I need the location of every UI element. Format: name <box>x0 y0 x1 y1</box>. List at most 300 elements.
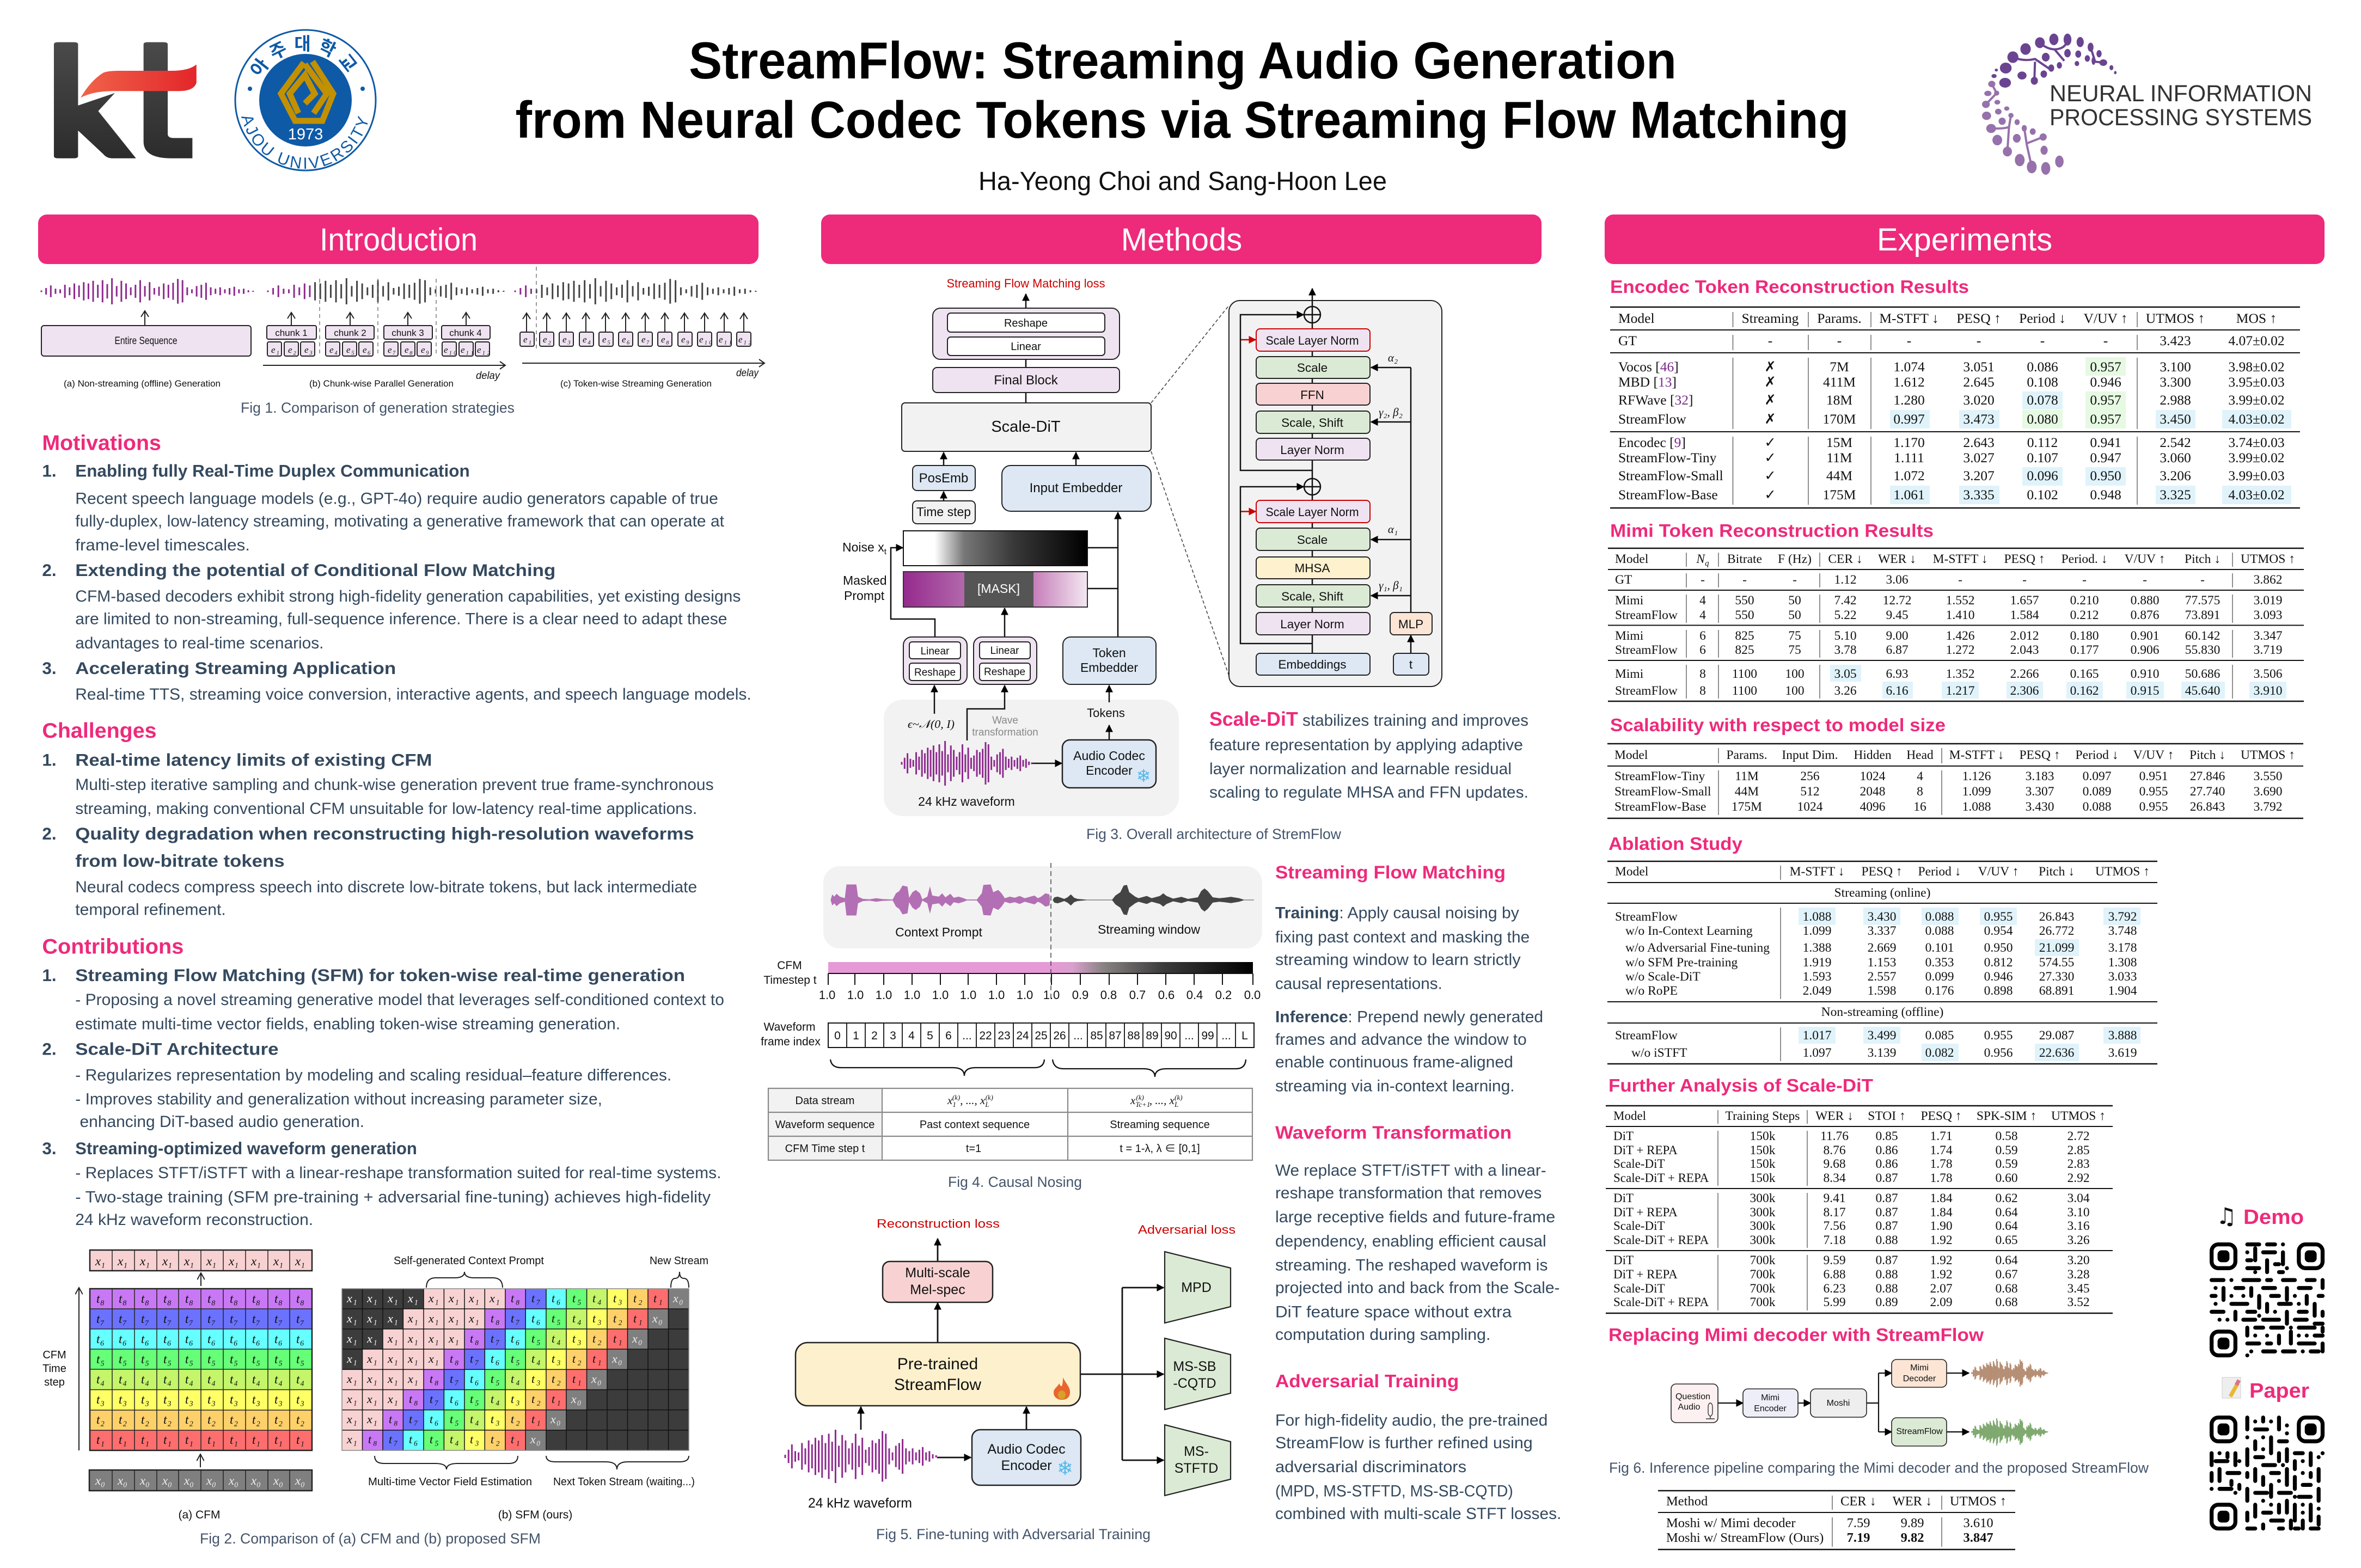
table: Ablation Study: 22.636 <box>2039 1046 2075 1060</box>
table: Further Analysis: 0.64 <box>1995 1253 2018 1267</box>
table: Mimi results: 3.05 <box>1834 667 1857 681</box>
table: Ablation Study: 574.55 <box>2039 955 2074 970</box>
table: Scalability: Period ↓ <box>2076 748 2118 762</box>
table: Encodec results: 2.645 <box>1963 374 1995 390</box>
figure 6: inference pipeline <box>1671 1359 2048 1446</box>
table: Mimi results: 1.584 <box>2010 608 2039 622</box>
table: Moshi comparison: CER ↓ <box>1840 1494 1876 1509</box>
table: Mimi results: 6 <box>1699 629 1706 643</box>
table: Further Analysis: Scale-DiT <box>1613 1219 1665 1233</box>
text block: Methods explanations: We replace STFT/iSTFT with a linear- <box>1275 1161 1546 1179</box>
table: Encodec results: 4.03±0.02 <box>2228 487 2285 503</box>
figure 4: causal noising: 0.9 <box>1072 988 1088 1002</box>
table: Ablation Study: 27.330 <box>2039 970 2074 984</box>
chart: SFM grid: x₁x₁x₁x₁x₁x₁x₁x₁x₁x₁ <box>346 1291 418 1365</box>
table: Further Analysis: 1.84 <box>1930 1191 1953 1205</box>
table: Mimi results: 5.10 <box>1834 629 1857 643</box>
table: Scalability: 512 <box>1800 785 1820 799</box>
table: Scalability: 0.951 <box>2139 769 2168 783</box>
table: Further Analysis: 0.68 <box>1995 1282 2018 1296</box>
table: data stream: t=1 <box>966 1143 981 1155</box>
table: Encodec results: ✗ <box>1764 374 1776 390</box>
diagram: main pipeline <box>842 277 1229 808</box>
panel: Scale-DiT block detail: γ₂, β₂ <box>1379 406 1403 419</box>
table: Further Analysis: 0.86 <box>1875 1157 1898 1171</box>
text block: Methods explanations: frames and advance the window to <box>1275 1031 1527 1049</box>
table: Further Analysis: Training Steps <box>1726 1109 1800 1123</box>
table: Moshi comparison: Moshi w/ StreamFlow (Ours) <box>1666 1530 1824 1545</box>
table: Further Analysis: 0.88 <box>1875 1282 1898 1296</box>
table: Encodec results: 0.102 <box>2027 487 2058 503</box>
panel header: Methods <box>821 215 1542 264</box>
figure 4: causal noising: 1.0 <box>960 988 976 1002</box>
table: Encodec results: MOS ↑ <box>2236 310 2277 326</box>
table: Further Analysis: 9.41 <box>1823 1191 1846 1205</box>
table: Scalability: 2048 <box>1860 785 1885 799</box>
table: Ablation Study: 0.353 <box>1925 955 1954 970</box>
table: Encodec results: 3.027 <box>1963 450 1995 465</box>
table: Mimi results: 0.915 <box>2131 684 2159 698</box>
figure 2: CFM and SFM grids: (b) SFM (ours) <box>498 1509 572 1521</box>
table: data stream: , ..., x <box>960 1094 986 1107</box>
table: Mimi results: 77.575 <box>2185 593 2220 608</box>
diagram: main pipeline: Streaming Flow Matching loss <box>946 277 1105 290</box>
table: Mimi results: M-STFT ↓ <box>1933 552 1987 566</box>
table: Ablation Study: 0.946 <box>1984 970 2013 984</box>
heading: Replacing Mimi decoder: Replacing Mimi decoder with StreamFlow <box>1608 1325 1984 1345</box>
text block: Methods explanations: Streaming Flow Matching <box>1275 862 1506 883</box>
table: Scalability: 3.307 <box>2026 785 2054 799</box>
table: Mimi results: 3.506 <box>2254 667 2283 681</box>
figure 1: generation strategies: chunk 4 <box>449 328 482 338</box>
table: Scalability: StreamFlow-Small <box>1614 785 1711 799</box>
table: Scalability: 0.089 <box>2083 785 2111 799</box>
table: Ablation Study: 3.748 <box>2108 924 2137 938</box>
table: Further Analysis: DiT + REPA <box>1613 1205 1678 1219</box>
chart: SFM grid <box>341 1256 708 1487</box>
figure 5: adversarial fine-tuning: -CQTD <box>1173 1376 1216 1391</box>
text block: Introduction column: 1. <box>42 750 57 770</box>
table: Mimi results: 825 <box>1735 629 1754 643</box>
table: Encodec results: RFWave [32] <box>1618 392 1693 408</box>
table: data stream <box>768 1088 1252 1160</box>
table: Encodec results: 1.111 <box>1894 450 1924 465</box>
table: Encodec results: 3.423 <box>2160 333 2191 348</box>
table: Mimi results: 1100 <box>1732 667 1757 681</box>
table: Ablation Study: 0.955 <box>1984 910 2013 924</box>
table: Encodec results: 3.060 <box>2160 450 2191 465</box>
chart: SFM grid: x₀x₀x₀x₀x₀x₀x₀x₀ <box>530 1291 683 1446</box>
table: Further Analysis: 0.89 <box>1875 1295 1898 1309</box>
table: Further Analysis: 1.78 <box>1930 1171 1953 1185</box>
text block: Methods explanations: Training: Apply causal noising by <box>1275 904 1519 922</box>
table: data stream: 1 <box>952 1100 956 1108</box>
text block: Introduction column: frame-level timescales. <box>75 536 250 554</box>
table: Mimi results: Period. ↓ <box>2062 552 2107 566</box>
table: Mimi results: GT <box>1615 573 1632 587</box>
text block: Methods explanations <box>1275 862 1561 1523</box>
table: Encodec results: ✗ <box>1764 392 1776 408</box>
table: Encodec results: ✓ <box>1764 434 1776 450</box>
text block: Methods explanations: causal representations. <box>1275 975 1442 993</box>
table: Ablation Study: w/o In-Context Learning <box>1625 924 1753 938</box>
figure 4: causal noising: Context Prompt <box>895 925 982 939</box>
table: Mimi results: 0.906 <box>2131 643 2160 657</box>
table: Encodec results: 0.080 <box>2027 411 2058 427</box>
table: Moshi comparison: 9.82 <box>1901 1530 1924 1545</box>
table: Ablation Study: 1.904 <box>2108 984 2137 998</box>
figure 4: causal noising: 0.2 <box>1215 988 1232 1002</box>
table: Mimi results: 4 <box>1699 608 1706 622</box>
figure 3: overall architecture <box>842 277 1442 816</box>
table: Scalability: 1.099 <box>1962 785 1991 799</box>
table: Mimi results: 50.686 <box>2185 667 2221 681</box>
table: Encodec results: 18M <box>1826 392 1852 408</box>
table: data stream: Waveform sequence <box>775 1119 874 1131</box>
diagram: main pipeline: Token <box>1092 646 1126 660</box>
figure 6: inference pipeline: Encoder <box>1754 1404 1787 1413</box>
table: Ablation Study: 3.619 <box>2108 1046 2137 1060</box>
table: Further Analysis: 0.87 <box>1875 1191 1898 1205</box>
table: Ablation Study: 3.430 <box>1868 910 1896 924</box>
table: data stream: Past context sequence <box>920 1119 1030 1131</box>
table: data stream: L <box>984 1100 989 1108</box>
link: Paper: Paper <box>2249 1380 2309 1402</box>
table: Further Analysis: 700k <box>1750 1253 1776 1267</box>
table: Scalability: 11M <box>1735 769 1759 783</box>
table: Ablation Study: 0.176 <box>1925 984 1954 998</box>
table: Mimi results: 50 <box>1788 608 1801 622</box>
figure 4: causal noising: 1.0 <box>847 988 864 1002</box>
table: Encodec results: 7M <box>1830 359 1849 375</box>
table: Encodec results: 3.99±0.02 <box>2228 392 2285 408</box>
text block: Methods explanations: computation during sampling. <box>1275 1326 1490 1344</box>
table: Ablation Study: w/o RoPE <box>1625 984 1678 998</box>
figure 4: causal noising: Timestep t <box>763 974 817 987</box>
figure 5: adversarial fine-tuning: STFTD <box>1175 1461 1218 1476</box>
table: Mimi results: 1.272 <box>1946 643 1974 657</box>
table: Scalability: 3.792 <box>2254 800 2282 814</box>
text block: Methods explanations: DiT feature space without extra <box>1275 1303 1512 1321</box>
panel header: Introduction <box>38 215 759 264</box>
heading: Scalability: Scalability with respect to model size <box>1610 715 1946 735</box>
figure 5: adversarial fine-tuning: Multi-scale <box>905 1265 970 1281</box>
table: Ablation Study: 0.956 <box>1984 1046 2013 1060</box>
chart: SFM grid: x₁x₁x₁x₁t₈t₇t₆t₅t₄t₃t₂t₁ <box>407 1312 643 1325</box>
table: Encodec results: Encodec [9] <box>1618 434 1686 450</box>
table: Encodec results: 0.107 <box>2027 450 2058 465</box>
table: Further Analysis: 1.92 <box>1930 1233 1953 1247</box>
table: Further Analysis: 1.71 <box>1930 1129 1953 1143</box>
text block: Introduction column: Motivations <box>42 432 161 455</box>
table: Mimi results: Pitch ↓ <box>2185 552 2221 566</box>
table: Ablation Study: Streaming (online) <box>1834 886 1930 900</box>
table: Encodec results: V/UV ↑ <box>2083 310 2128 326</box>
figure 4: causal noising: 6 <box>945 1030 952 1042</box>
table: Scalability: 44M <box>1735 785 1759 799</box>
figure 4: causal noising: 1.0 <box>932 988 949 1002</box>
table: Mimi results: 6.87 <box>1886 643 1909 657</box>
table: Ablation Study: 1.088 <box>1803 910 1831 924</box>
text block: Methods explanations: (MPD, MS-STFTD, MS-SB-CQTD) <box>1275 1482 1513 1500</box>
table: Ablation Study: 3.888 <box>2108 1028 2137 1043</box>
table: Mimi results: 550 <box>1735 593 1754 608</box>
table: Mimi results: 1.657 <box>2010 593 2039 608</box>
table: Further Analysis: 0.65 <box>1995 1233 2018 1247</box>
link: Demo <box>2216 1203 2304 1229</box>
diagram: main pipeline: Reshape <box>1004 317 1048 329</box>
figure 4: causal noising: 85 <box>1090 1030 1103 1042</box>
text block: Introduction column: Real-time latency limits of existing CFM <box>75 750 432 770</box>
text block: Scale-DiT description: feature representation by applying adaptive <box>1209 736 1523 754</box>
table: Encodec results: 11M <box>1826 450 1852 465</box>
panel: Scale-DiT block detail: Layer Norm <box>1280 617 1344 631</box>
table: Mimi results: 3.719 <box>2254 643 2282 657</box>
table: Further Analysis: 11.76 <box>1820 1129 1849 1143</box>
table: Mimi results: Mimi <box>1615 593 1644 608</box>
table: Encodec results: 3.300 <box>2160 374 2191 390</box>
table: Ablation Study: 3.499 <box>1868 1028 1896 1043</box>
table: Mimi results: 1.217 <box>1946 684 1975 698</box>
figure 4: causal noising: 1 <box>853 1030 859 1042</box>
chart: SFM grid: New Stream <box>650 1255 708 1267</box>
table: data stream: Streaming sequence <box>1110 1119 1210 1131</box>
chart: CFM grid: t₈t₈t₈t₈t₈t₈t₈t₈t₈t₈ <box>96 1292 304 1306</box>
table: data stream: Data stream <box>796 1095 854 1107</box>
table: Encodec results: 0.948 <box>2090 487 2121 503</box>
table: Further Analysis: 7.56 <box>1823 1219 1846 1233</box>
figure 1: generation strategies: Entire Sequence <box>114 335 178 347</box>
table: Scalability: StreamFlow-Tiny <box>1614 769 1705 783</box>
table: Encodec results: 175M <box>1823 487 1856 503</box>
table: Further Analysis: 0.86 <box>1875 1143 1898 1157</box>
table: Further Analysis: 8.34 <box>1823 1171 1846 1185</box>
table: Further Analysis: 3.52 <box>2067 1295 2090 1309</box>
table: Mimi results: - <box>2022 573 2027 587</box>
figure 4: causal noising: 26 <box>1053 1030 1066 1042</box>
figure 4: causal noising: 24 <box>1016 1030 1029 1042</box>
text block: Introduction column: from low-bitrate tokens <box>75 851 285 871</box>
table: Mimi results: 825 <box>1735 643 1754 657</box>
figure 5: adversarial fine-tuning: Pre-trained <box>897 1355 978 1373</box>
table: Further Analysis: 0.59 <box>1995 1143 2018 1157</box>
table: Mimi results: 2.043 <box>2010 643 2039 657</box>
text block: Introduction column: Enabling fully Real-Time Duplex Communication <box>75 461 470 481</box>
table: Further Analysis: 3.10 <box>2067 1205 2090 1220</box>
table: Further Analysis: 3.45 <box>2067 1282 2090 1296</box>
table: Encodec results: M-STFT ↓ <box>1879 310 1939 326</box>
table: Moshi comparison: Method <box>1666 1494 1708 1509</box>
table: Further Analysis <box>1606 1106 2113 1313</box>
text block: Methods explanations: reshape transformation that removes <box>1275 1184 1542 1202</box>
diagram: main pipeline: Reshape <box>914 667 956 678</box>
table: Encodec results: ✓ <box>1764 487 1776 503</box>
table: Scalability: UTMOS ↑ <box>2241 748 2295 762</box>
text block: Introduction column: - Regularizes representation by modeling and scaling residual–feature differences. <box>75 1066 671 1084</box>
table: Mimi results: 60.142 <box>2185 629 2220 643</box>
table: Further Analysis: DiT <box>1613 1129 1634 1143</box>
text block: Introduction column: Accelerating Streaming Application <box>75 658 396 678</box>
figure 5: adversarial fine-tuning: Audio Codec <box>987 1442 1066 1457</box>
table: Further Analysis: 0.67 <box>1995 1267 2018 1282</box>
table: Encodec results: 3.473 <box>1963 411 1995 427</box>
table: Further Analysis: 700k <box>1750 1282 1776 1296</box>
table: Ablation Study: 0.088 <box>1925 924 1954 938</box>
table: Encodec results: 3.206 <box>2160 468 2191 483</box>
table: Further Analysis: 0.87 <box>1875 1219 1898 1233</box>
table: Mimi results: 3.347 <box>2254 629 2283 643</box>
figure 5: adversarial fine-tuning: MS-SB <box>1173 1359 1216 1374</box>
table: Mimi results: 0.165 <box>2070 667 2099 681</box>
table: Further Analysis: 0.87 <box>1875 1253 1898 1267</box>
table: Mimi results: 100 <box>1785 667 1805 681</box>
text block: Methods explanations: StreamFlow is further refined using <box>1275 1434 1533 1452</box>
table: Mimi results: 100 <box>1785 684 1805 698</box>
diagram: main pipeline: 24 kHz waveform <box>918 794 1015 808</box>
table: Further Analysis: 150k <box>1750 1157 1776 1171</box>
text block: Methods explanations: Waveform Transformation <box>1275 1123 1512 1143</box>
table: Encodec results: 0.941 <box>2090 434 2121 450</box>
table: Encodec results: Params. <box>1817 310 1862 326</box>
table: Ablation Study: w/o Adversarial Fine-tuning <box>1625 941 1770 955</box>
text block: Methods explanations: combined with multi-scale STFT losses. <box>1275 1505 1561 1523</box>
table: Further Analysis: SPK-SIM ↑ <box>1977 1109 2036 1123</box>
table: Further Analysis: 0.68 <box>1995 1295 2018 1309</box>
text block: Introduction column: 2. <box>42 824 57 843</box>
table: Mimi results: 0.901 <box>2131 629 2159 643</box>
logo: NeurIPS: NEURAL INFORMATION <box>2050 81 2312 107</box>
table: Further Analysis: Scale-DiT + REPA <box>1613 1295 1709 1309</box>
table: Ablation Study: 1.593 <box>1803 970 1831 984</box>
table: Mimi results: 0.177 <box>2070 643 2099 657</box>
text block: Methods explanations: For high-fidelity audio, the pre-trained <box>1275 1411 1548 1429</box>
diagram: main pipeline: ϵ~𝒩(0, I) <box>908 718 955 731</box>
figure 4: causal noising: 1.0 <box>1017 988 1033 1002</box>
table: Mimi results: StreamFlow <box>1615 643 1678 657</box>
chart: CFM grid: t₇t₇t₇t₇t₇t₇t₇t₇t₇t₇ <box>96 1312 304 1326</box>
table: Encodec results: - <box>1977 333 1981 348</box>
table: Mimi results: PESQ ↑ <box>2004 552 2045 566</box>
figure 4: causal noising: 1.0 <box>876 988 892 1002</box>
text block: Introduction column: 3. <box>42 1138 57 1158</box>
text block: Introduction column: 2. <box>42 1039 57 1058</box>
icon: QR code paper <box>2212 1418 2322 1528</box>
table: Further Analysis: 0.58 <box>1995 1129 2018 1143</box>
table: Further Analysis: Scale-DiT + REPA <box>1613 1233 1709 1247</box>
table: data stream: (k) <box>1175 1093 1183 1101</box>
panel: Scale-DiT block detail: t <box>1409 658 1413 671</box>
table: Further Analysis: DiT <box>1613 1253 1634 1267</box>
chart: CFM grid: t₄t₄t₄t₄t₄t₄t₄t₄t₄t₄ <box>96 1373 304 1386</box>
table: Further Analysis: 5.99 <box>1823 1295 1846 1309</box>
table: Further Analysis: 0.62 <box>1995 1191 2018 1205</box>
table: Encodec results: 170M <box>1823 411 1856 427</box>
logo: Ajou University seal: AJOU UNIVERSITY <box>241 115 368 169</box>
table: Encodec results: 0.946 <box>2090 374 2121 390</box>
chart: SFM grid: x₁x₁x₁x₁t₈t₇t₆t₅t₄t₃t₂t₁ <box>366 1352 602 1365</box>
table: Encodec results: 3.74±0.03 <box>2228 434 2285 450</box>
table: Encodec results: 3.051 <box>1963 359 1995 375</box>
figure 4: causal noising: 23 <box>998 1030 1011 1042</box>
table: Mimi results: - <box>1958 573 1962 587</box>
figure 1: generation strategies: e₁e₂e₃e₄e₅e₆e₇e₈e₉e₁₀e₁₁e₁₂ <box>271 345 490 355</box>
table: Further Analysis: 3.28 <box>2067 1267 2090 1282</box>
table: Scalability: 27.740 <box>2190 785 2225 799</box>
caption: figure 6: Fig 6. Inference pipeline comparing the Mimi decoder and the proposed StreamFlow <box>1609 1460 2149 1476</box>
diagram: main pipeline: PosEmb <box>919 471 968 486</box>
panel: Scale-DiT block detail: α₁ <box>1388 523 1398 536</box>
table: Further Analysis: 7.18 <box>1823 1233 1846 1247</box>
table: Mimi results: 0.162 <box>2070 684 2099 698</box>
table: Encodec results: 3.335 <box>1963 487 1995 503</box>
table: Mimi results: 3.019 <box>2254 593 2282 608</box>
table: Ablation Study: Period ↓ <box>1918 865 1961 879</box>
panel: Scale-DiT block detail: Embeddings <box>1278 658 1347 671</box>
table: Encodec results: 0.078 <box>2027 392 2058 408</box>
table: Further Analysis: 2.85 <box>2067 1143 2090 1157</box>
link: Paper <box>2222 1377 2309 1402</box>
logo: Ajou University seal: 아주대학교 <box>250 35 357 74</box>
figure 4: causal noising: 1.0 <box>988 988 1005 1002</box>
table: Scalability: 3.183 <box>2026 769 2054 783</box>
table: Further Analysis: 1.92 <box>1930 1253 1953 1267</box>
authors: Ha-Yeong Choi and Sang-Hoon Lee <box>978 167 1387 196</box>
figure 5: adversarial fine-tuning: StreamFlow <box>894 1376 981 1394</box>
table: data stream: (k) <box>986 1093 993 1101</box>
figure 4: causal noising: 0.7 <box>1129 988 1146 1002</box>
table: Encodec results: ✗ <box>1764 411 1776 427</box>
figure 4: causal noising: ... <box>1221 1030 1231 1042</box>
table: Further Analysis: 6.23 <box>1823 1282 1846 1296</box>
table: Scalability: 26.843 <box>2190 800 2225 814</box>
figure 5: adversarial fine-tuning: MS- <box>1184 1444 1209 1459</box>
text block: Introduction column: Neural codecs compress speech into discrete low-bitrate tokens, but lack intermediate <box>75 878 697 896</box>
panel header: Experiments <box>1605 215 2325 264</box>
logo: NeurIPS: PROCESSING SYSTEMS <box>2050 105 2312 131</box>
table: Further Analysis: 3.04 <box>2067 1191 2090 1205</box>
table: Mimi results: 0.910 <box>2131 667 2159 681</box>
table: Encodec results: 44M <box>1826 468 1852 483</box>
table: Mimi results: - <box>1742 573 1747 587</box>
text block: Introduction column: Contributions <box>42 935 184 959</box>
text block: Methods explanations: streaming. The reshaped waveform is <box>1275 1257 1548 1275</box>
table: Encodec results: GT <box>1618 333 1637 348</box>
table: Encodec results: StreamFlow-Base <box>1618 487 1718 503</box>
table: Ablation Study: 3.178 <box>2108 941 2137 955</box>
table: Further Analysis: Scale-DiT <box>1613 1157 1665 1171</box>
heading: Further Analysis: Further Analysis of Scale-DiT <box>1608 1075 1873 1095</box>
table: Further Analysis: 0.64 <box>1995 1219 2018 1233</box>
table: Ablation Study: 0.955 <box>1984 1028 2013 1043</box>
table: Ablation Study: 1.017 <box>1803 1028 1832 1043</box>
table: Further Analysis: 0.88 <box>1875 1233 1898 1247</box>
logo: NeurIPS <box>1982 34 2312 175</box>
text block: Methods explanations: large receptive fields and future-frame <box>1275 1208 1555 1226</box>
table: Mimi results: - <box>2200 573 2205 587</box>
caption: figure 1: Fig 1. Comparison of generation strategies <box>241 400 515 416</box>
panel: Scale-DiT block detail: Scale <box>1297 361 1328 375</box>
heading: Mimi results: Mimi Token Reconstruction Results <box>1610 520 1934 541</box>
table: Further Analysis: WER ↓ <box>1815 1109 1854 1123</box>
table: Further Analysis: DiT + REPA <box>1613 1267 1678 1281</box>
table: Encodec results: 0.112 <box>2027 434 2058 450</box>
chart: SFM grid: x₁x₁x₁t₈t₇t₆t₅t₄t₃t₂t₁ <box>346 1392 561 1406</box>
diagram: main pipeline: transformation <box>972 727 1038 738</box>
table: Further Analysis: STOI ↑ <box>1868 1109 1906 1123</box>
table: Mimi results: 75 <box>1788 643 1801 657</box>
figure 4: causal noising: 1.0 <box>819 988 835 1002</box>
text block: Introduction column: Quality degradation when reconstructing high-resolution waveforms <box>75 824 694 843</box>
